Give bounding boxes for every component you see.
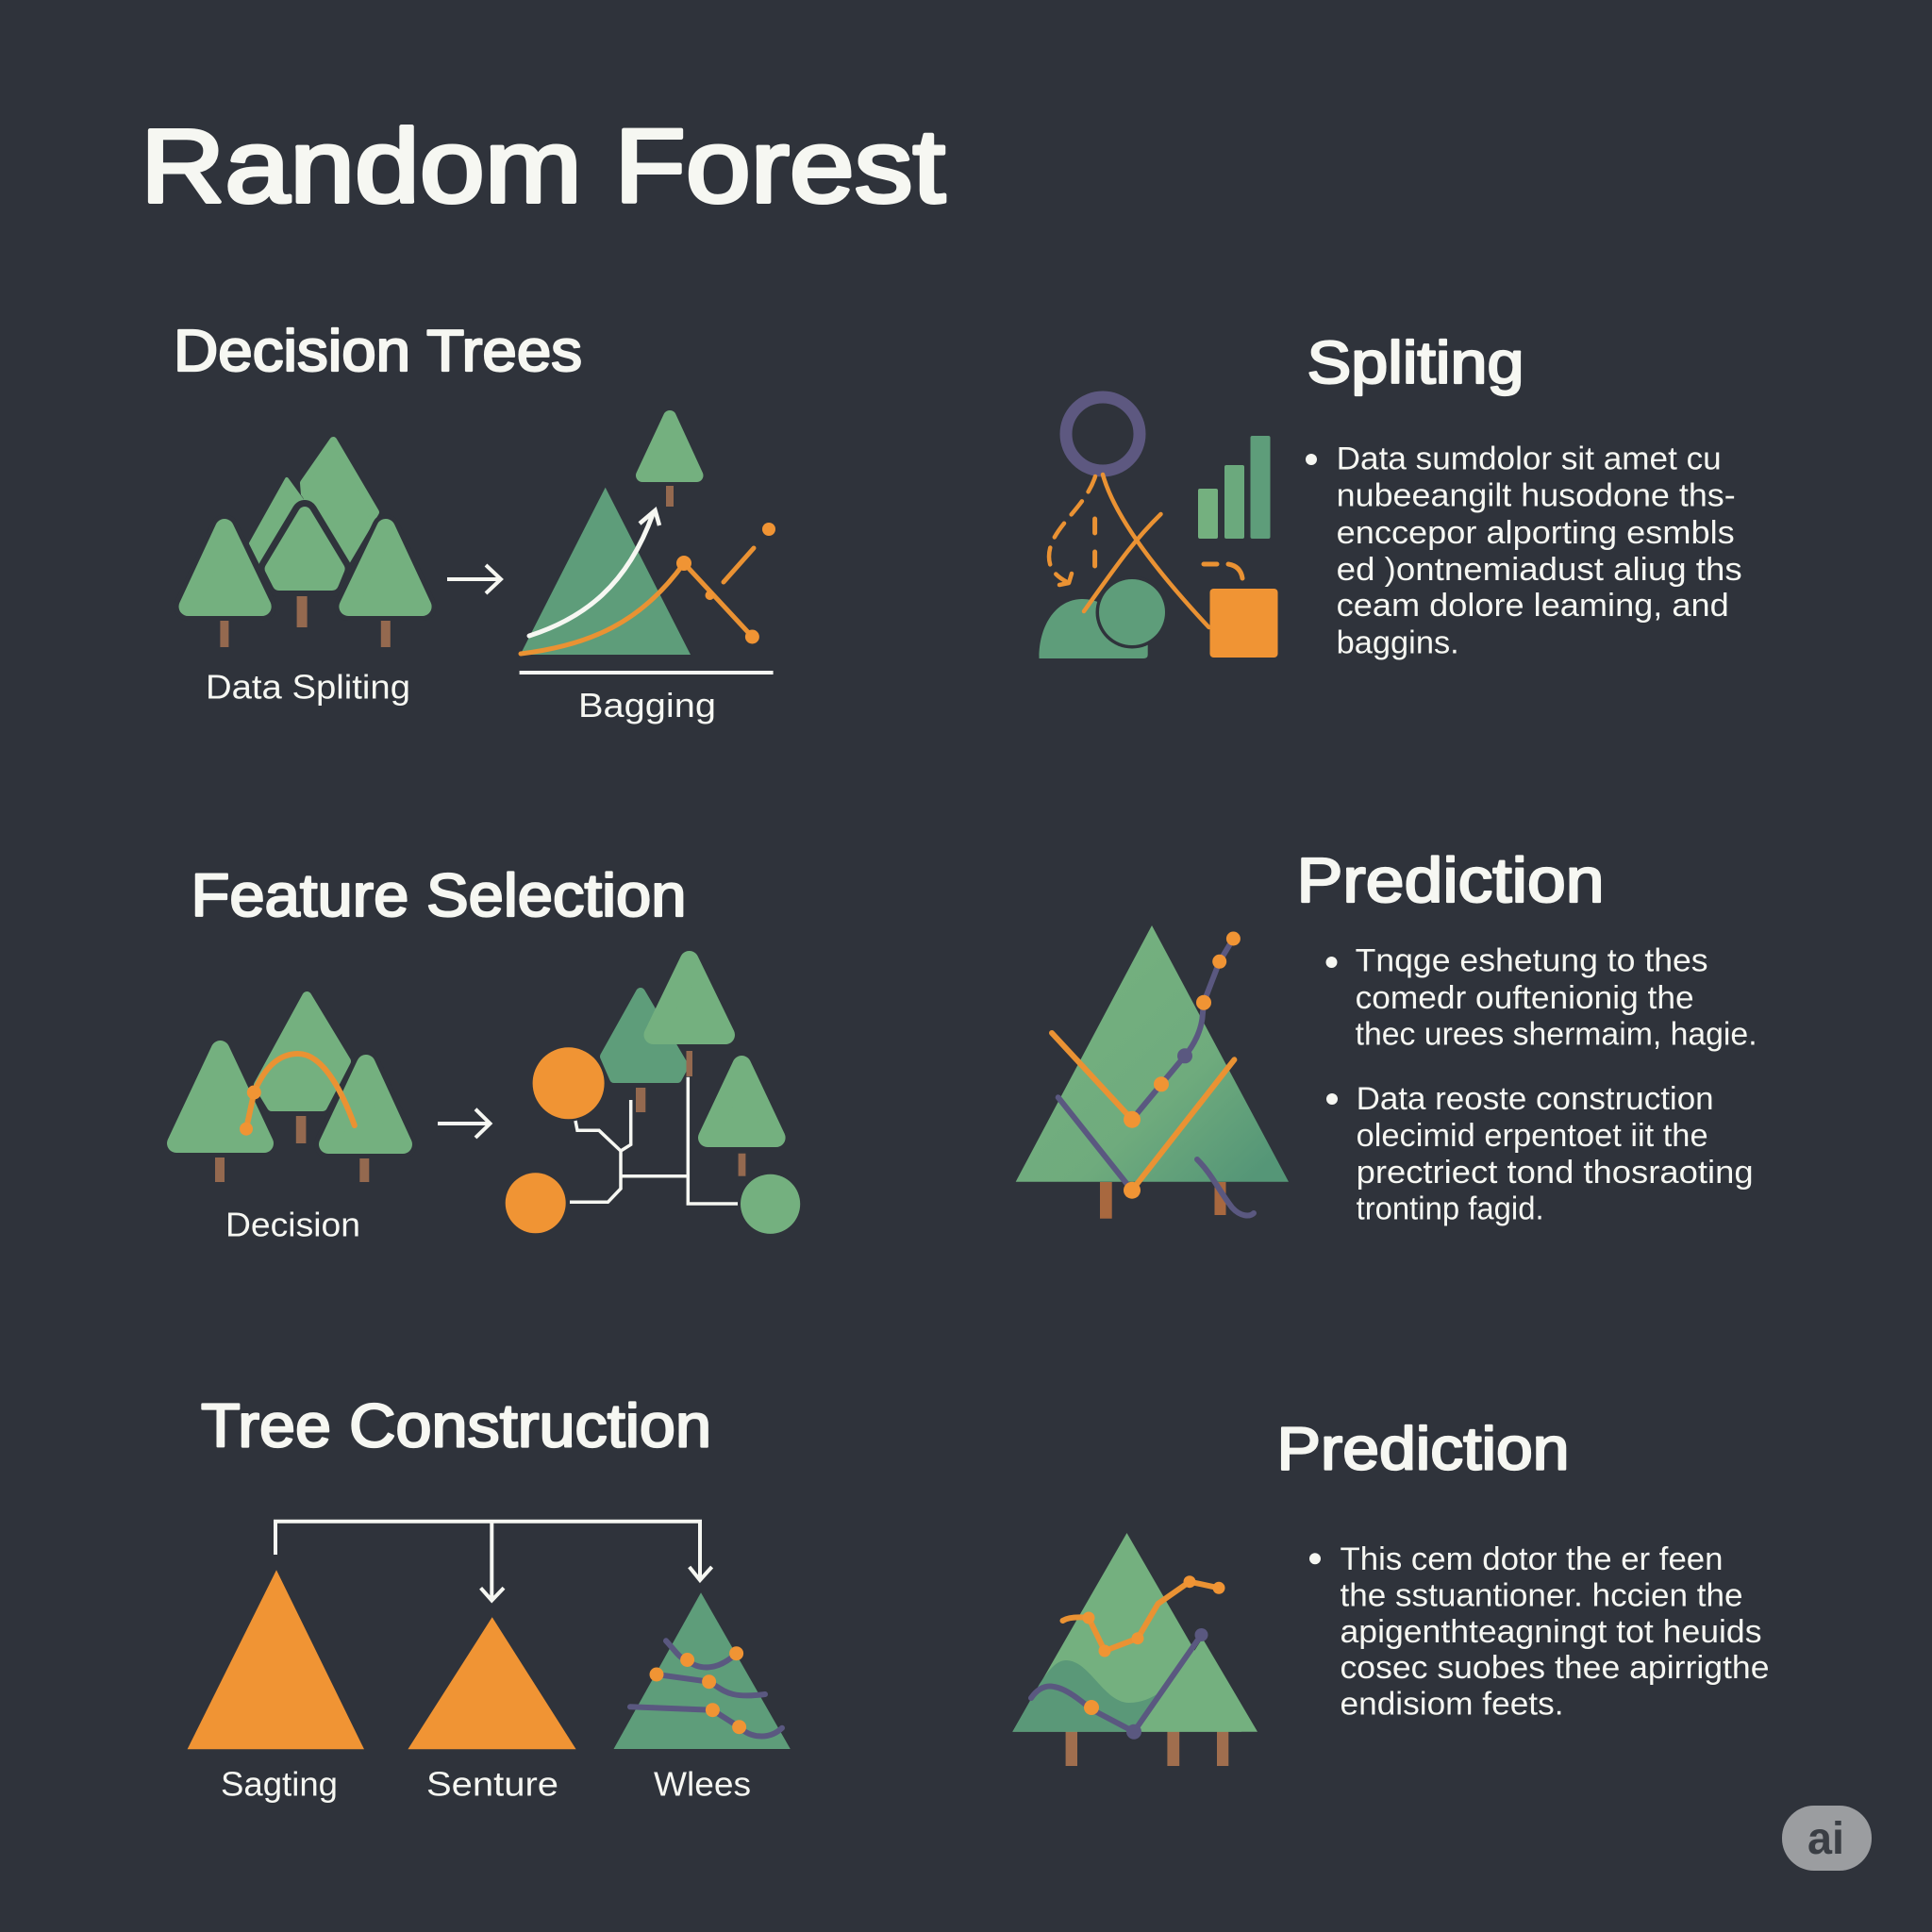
- bullet text: ed )ontnemiadust aliug ths: [1337, 552, 1742, 588]
- heading: prediction: Prediction: [1296, 845, 1604, 916]
- bullet text: nubeeangilt husodone ths-: [1337, 478, 1736, 514]
- bullet text: ceam dolore leaming, and: [1337, 588, 1729, 624]
- bullet text: This cem dotor the er feen: [1340, 1541, 1723, 1577]
- panel: spliting: [1039, 330, 1742, 661]
- bullet text: [1306, 441, 1742, 661]
- heading: prediction: Prediction: [1277, 1415, 1570, 1483]
- bullet text: comedr ouftenionig the: [1356, 980, 1694, 1016]
- icon: prediction tree: [1016, 925, 1289, 1219]
- bullet text: [1326, 942, 1757, 1226]
- bullet text: endisiom feets.: [1340, 1686, 1564, 1722]
- bullet text: Data reoste construction: [1357, 1081, 1714, 1117]
- bullet text: trontinp fagid.: [1357, 1191, 1544, 1226]
- label: sagting: Sagting: [221, 1764, 338, 1803]
- bullet text: Data sumdolor sit amet cu: [1337, 441, 1722, 477]
- panel: prediction (bottom): [1012, 1415, 1770, 1766]
- bullet text: baggins.: [1337, 625, 1459, 661]
- heading: feature selection: Feature Selection: [191, 861, 687, 929]
- connector arrows: [275, 1522, 712, 1600]
- badge: ai: [1782, 1806, 1872, 1871]
- panel: tree construction: [188, 1391, 791, 1803]
- heading: tree construction: Tree Construction: [201, 1391, 711, 1459]
- label: senture: Senture: [426, 1764, 558, 1803]
- label: wlees: Wlees: [654, 1764, 751, 1803]
- heading: spliting: Spliting: [1307, 330, 1524, 396]
- badge: ai: ai: [1807, 1814, 1844, 1864]
- label: decision: Decision: [225, 1206, 360, 1244]
- bullet text: thec urees shermaim, hagie.: [1356, 1017, 1757, 1053]
- triangle: sagting: [188, 1570, 364, 1749]
- icon: cluster of trees: [189, 441, 423, 647]
- bullet text: [1309, 1541, 1770, 1722]
- icon: decorated tree: [613, 1592, 791, 1749]
- bullet text: enccepor alporting esmbls: [1337, 515, 1735, 551]
- bullet text: apigenthteagningt tot heuids: [1340, 1614, 1762, 1650]
- title: Random Forest: [141, 108, 945, 225]
- bullet text: olecimid erpentoet iit the: [1357, 1118, 1708, 1154]
- label: bagging: Bagging: [578, 686, 716, 724]
- label: data spliting: Data Spliting: [206, 668, 410, 706]
- arrow: trees to bagging: [447, 565, 501, 593]
- panel: feature selection: [176, 861, 800, 1244]
- bullet text: cosec suobes thee apirrigthe: [1340, 1650, 1770, 1686]
- icon: trees with arc: [176, 996, 403, 1182]
- icon: bagging chart: [520, 417, 775, 675]
- panel: prediction (middle): [1016, 845, 1757, 1226]
- icon: prediction trees: [1012, 1533, 1257, 1766]
- icon: forest with decision nodes: [506, 960, 800, 1234]
- arrow: trees to nodes: [438, 1109, 491, 1138]
- bullet text: prectriect tond thosraoting: [1357, 1155, 1754, 1191]
- panel: decision trees: [174, 319, 775, 724]
- triangle: senture: [408, 1617, 576, 1749]
- bullet text: Tnqge eshetung to thes: [1356, 942, 1708, 978]
- bullet text: the sstuantioner. hccien the: [1340, 1577, 1743, 1613]
- icon: splitting diagram: [1039, 397, 1277, 658]
- heading: decision trees: Decision Trees: [174, 319, 582, 384]
